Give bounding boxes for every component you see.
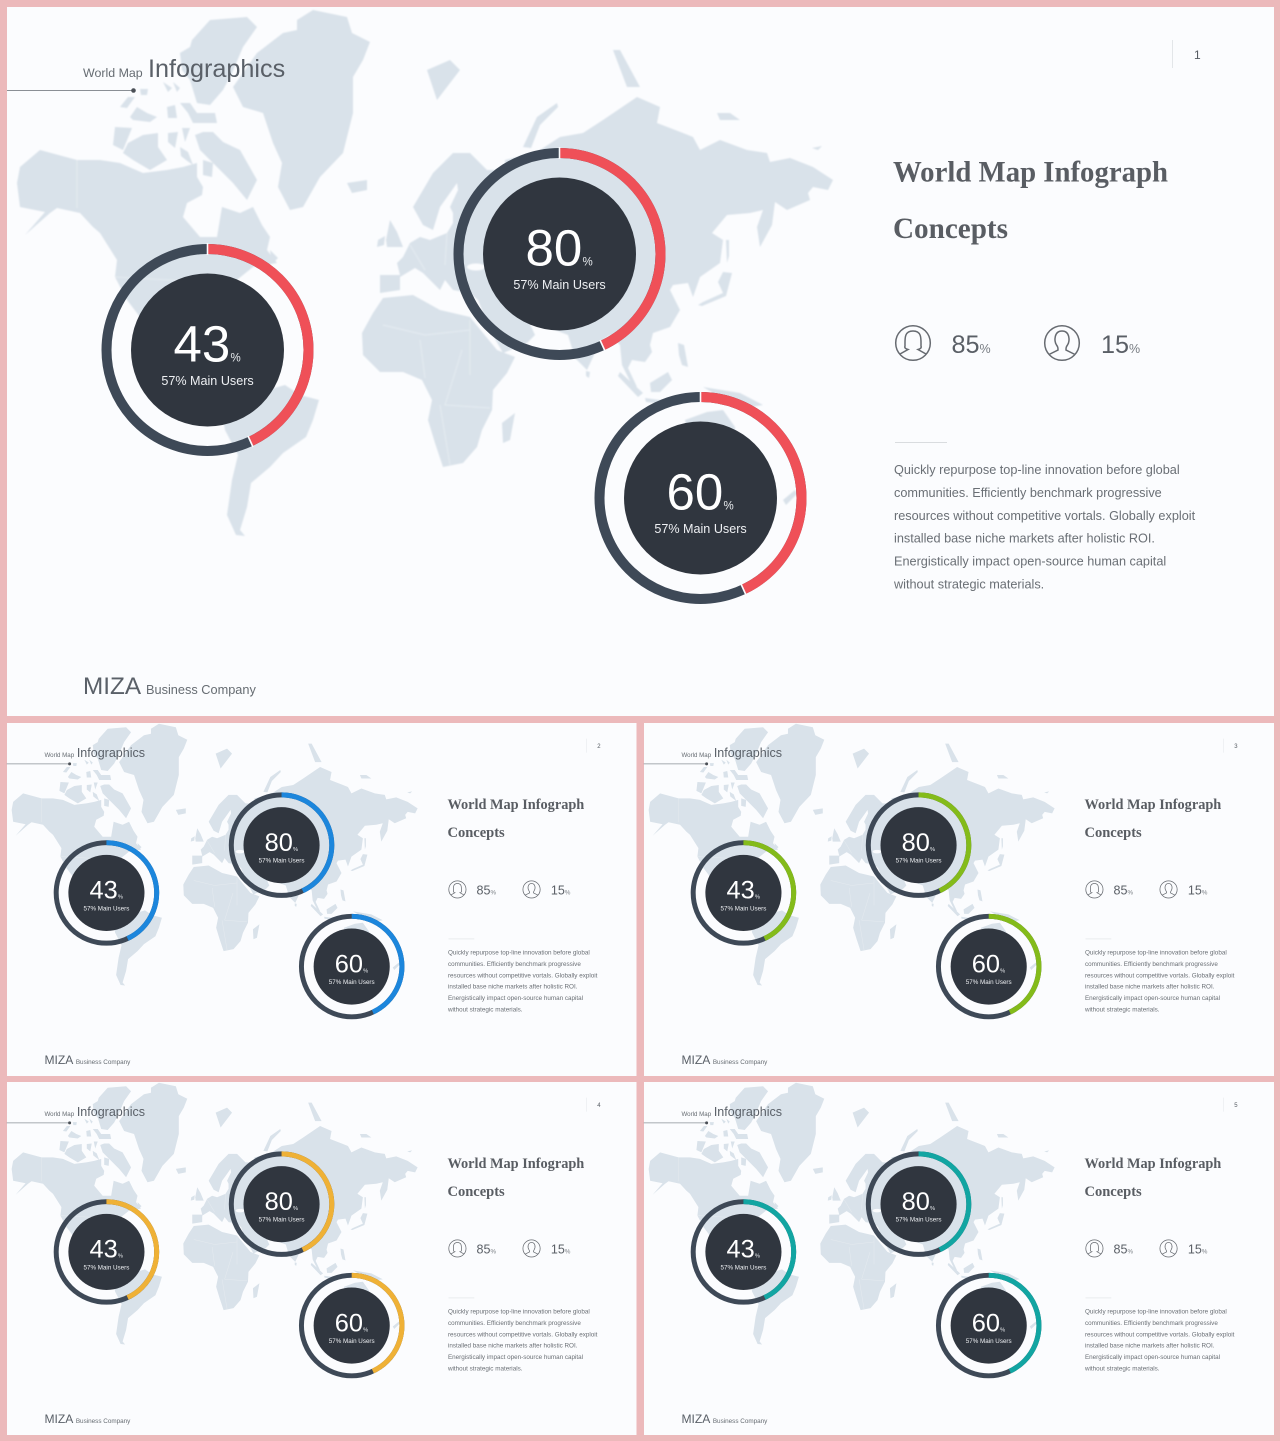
description paragraph: without strategic materials.: [447, 1365, 523, 1372]
heading pointer line: [644, 1121, 708, 1124]
heading: World Map Infographics: Infographics: [148, 55, 285, 83]
icon: man user: [523, 1240, 540, 1257]
donut: 80 percent: [458, 147, 660, 355]
title: Concepts: [1084, 1184, 1142, 1200]
donut: 43 percent: [56, 1202, 157, 1302]
donut: 80 percent: %: [930, 847, 935, 853]
icon: woman user: [1086, 881, 1103, 898]
page number: [1224, 739, 1238, 753]
heading: World Map: [44, 1111, 75, 1118]
footer: company name: [681, 1053, 768, 1067]
stat: 15 percent: [551, 1242, 571, 1256]
donut: 43 percent: %: [230, 352, 241, 364]
description paragraph: installed base niche markets after holistic ROI.: [448, 984, 578, 991]
donut: 43 percent: 57% Main Users: [84, 905, 129, 912]
footer: company name: Business Company: [713, 1418, 768, 1425]
donut: 60 percent: 57% Main Users: [966, 1338, 1012, 1345]
heading: Infographics: [77, 746, 145, 760]
donut: 43 percent: 43: [174, 316, 230, 372]
donut: 80 percent: 57% Main Users: [896, 1217, 941, 1224]
donut: 60 percent: [600, 391, 802, 599]
donut: 80 percent: 80: [265, 1188, 293, 1216]
donut: 43 percent: %: [755, 1254, 760, 1260]
stat: 85 percent: 85: [1114, 883, 1128, 897]
world map: [12, 1083, 418, 1344]
heading pointer line: [7, 1121, 71, 1124]
stat: 85 percent: 85: [477, 1242, 491, 1256]
footer: company name: MIZA: [44, 1412, 74, 1426]
description paragraph: Quickly repurpose top-line innovation before global: [448, 950, 590, 957]
title: Concepts: [447, 825, 505, 841]
donut: 60 percent: %: [724, 500, 734, 512]
donut: 43 percent: [693, 843, 794, 943]
description paragraph: resources without competitive vortals. Globally exploit: [448, 972, 598, 979]
donut: 60 percent: 57% Main Users: [329, 1338, 375, 1345]
description paragraph: [1084, 1309, 1235, 1372]
description paragraph: Energistically impact open-source human capital: [1085, 1354, 1220, 1361]
description paragraph: without strategic materials.: [447, 1006, 523, 1013]
donut: 80 percent: 57% Main Users: [259, 858, 304, 865]
title: World Map Infograph Concepts: [893, 156, 1168, 245]
footer: company name: Business Company: [713, 1059, 768, 1066]
description paragraph: [447, 1309, 598, 1372]
stat: 85 percent: [1114, 1242, 1134, 1256]
icon: man user: [1160, 1240, 1177, 1257]
stat: 85 percent: [1114, 883, 1134, 897]
panel: slide 4, amber accent: [7, 1082, 637, 1435]
icon: woman user: [449, 881, 466, 898]
stat: 15 percent: %: [1202, 889, 1208, 896]
description paragraph: communities. Efficiently benchmark progressive: [894, 486, 1162, 500]
description paragraph: Energistically impact open-source human capital: [1085, 995, 1220, 1002]
description paragraph: Quickly repurpose top-line innovation before global: [448, 1309, 590, 1316]
heading: [44, 746, 145, 760]
page number: [587, 739, 601, 753]
donut: 80 percent: %: [293, 847, 298, 853]
donut: 80 percent: [868, 1154, 969, 1254]
panel: slide 3, green accent: [644, 723, 1274, 1076]
stat: 15 percent: [1188, 1242, 1208, 1256]
donut: 80 percent: %: [293, 1206, 298, 1212]
donut: 60 percent: [301, 1275, 402, 1376]
stat: 85 percent: %: [491, 889, 497, 896]
description paragraph: Quickly repurpose top-line innovation before global: [894, 463, 1180, 477]
donut: 43 percent: 57% Main Users: [721, 905, 766, 912]
title: [1084, 797, 1222, 841]
donut: 80 percent: 57% Main Users: [259, 1217, 304, 1224]
description paragraph: installed base niche markets after holistic ROI.: [1085, 984, 1215, 991]
heading: World Map: [681, 1111, 712, 1118]
stat: 15 percent: %: [1129, 342, 1140, 356]
short divider: [895, 442, 947, 444]
donut: 60 percent: [938, 916, 1039, 1017]
donut: 80 percent: 80: [902, 1188, 930, 1216]
donut: 80 percent: [868, 795, 969, 895]
world map: [649, 1083, 1055, 1344]
donut: 60 percent: 57% Main Users: [329, 979, 375, 986]
icon: woman user: [896, 326, 930, 360]
stat: 15 percent: 15: [1188, 883, 1202, 897]
stat: 15 percent: %: [1202, 1248, 1208, 1255]
description paragraph: without strategic materials.: [1084, 1365, 1160, 1372]
donut: 43 percent: 43: [90, 1236, 118, 1264]
heading pointer line: [7, 762, 71, 765]
donut: 43 percent: 57% Main Users: [161, 374, 254, 388]
donut: 60 percent: %: [1000, 1327, 1005, 1333]
donut: 80 percent: 80: [902, 829, 930, 857]
donut: 60 percent: %: [363, 968, 368, 974]
donut: 43 percent: %: [118, 1254, 123, 1260]
title: Concepts: [1084, 825, 1142, 841]
stat: 15 percent: %: [565, 889, 571, 896]
stat: 85 percent: 85: [477, 883, 491, 897]
title: World Map Infograph Concepts: World Map Infograph: [893, 156, 1168, 188]
donut: 60 percent: %: [363, 1327, 368, 1333]
world map: [649, 724, 1055, 985]
donut: 43 percent: 57% Main Users: [84, 1264, 129, 1271]
world map: [12, 724, 418, 985]
donut: 43 percent: 43: [727, 1236, 755, 1264]
short divider: [1085, 1297, 1111, 1299]
description paragraph: resources without competitive vortals. Globally exploit: [894, 509, 1196, 523]
description paragraph: communities. Efficiently benchmark progressive: [1085, 961, 1218, 968]
description paragraph: installed base niche markets after holistic ROI.: [894, 532, 1155, 546]
donut: 60 percent: [301, 916, 402, 1017]
stat: 15 percent: [551, 883, 571, 897]
donut: 80 percent: 80: [265, 829, 293, 857]
title: [447, 1156, 585, 1200]
heading pointer line: [7, 88, 136, 93]
description paragraph: Energistically impact open-source human capital: [448, 995, 583, 1002]
donut: 80 percent: %: [582, 256, 593, 268]
donut: 60 percent: 60: [972, 950, 1000, 978]
panel: main slide, red accent: [7, 7, 1274, 716]
donut: 43 percent: 43: [90, 877, 118, 905]
heading: [681, 1105, 782, 1119]
heading: Infographics: [714, 1105, 782, 1119]
donut: 43 percent: 57% Main Users: [721, 1264, 766, 1271]
donut: 80 percent: [231, 1154, 332, 1254]
heading: [681, 746, 782, 760]
donut: 60 percent: 60: [335, 1309, 363, 1337]
slide 4 content: [7, 1083, 601, 1426]
footer: company name: MIZA: [44, 1053, 74, 1067]
page number: 3: [1234, 744, 1238, 750]
page number: 1: [1194, 48, 1201, 62]
description paragraph: installed base niche markets after holistic ROI.: [448, 1343, 578, 1350]
footer: company name: [44, 1053, 131, 1067]
page number: [1224, 1098, 1238, 1112]
stat: 15 percent: 15: [1101, 331, 1129, 359]
title: World Map Infograph: [1084, 797, 1222, 813]
title: [1084, 1156, 1222, 1200]
description paragraph: Quickly repurpose top-line innovation before global: [1085, 1309, 1227, 1316]
panel: slide 5, teal accent: [644, 1082, 1274, 1435]
world map: [17, 10, 833, 536]
title: [447, 797, 585, 841]
short divider: [448, 1297, 474, 1299]
slide 2 content: [7, 724, 601, 1067]
donut: 60 percent: 57% Main Users: [966, 979, 1012, 986]
donut: 80 percent: %: [930, 1206, 935, 1212]
page number: 2: [597, 744, 601, 750]
icon: woman user: [449, 1240, 466, 1257]
donut: 43 percent: 43: [727, 877, 755, 905]
icon: man user: [1045, 326, 1079, 360]
description paragraph: communities. Efficiently benchmark progressive: [448, 1320, 581, 1327]
title: Concepts: [447, 1184, 505, 1200]
heading: Infographics: [77, 1105, 145, 1119]
heading: World Map: [681, 752, 712, 759]
description paragraph: [1084, 950, 1235, 1013]
stat: 85 percent: [477, 1242, 497, 1256]
stat: 85 percent: [477, 883, 497, 897]
description paragraph: resources without competitive vortals. Globally exploit: [1085, 1331, 1235, 1338]
description paragraph: [893, 463, 1196, 591]
stat: 85 percent: 85: [952, 331, 980, 359]
description paragraph: without strategic materials.: [1084, 1006, 1160, 1013]
title: World Map Infograph: [447, 797, 585, 813]
stat: 85 percent: %: [1128, 889, 1134, 896]
page number: 4: [597, 1103, 601, 1109]
heading pointer line: [644, 762, 708, 765]
heading: World Map Infographics: World Map: [83, 66, 143, 80]
donut: 43 percent: [56, 843, 157, 943]
title: World Map Infograph: [447, 1156, 585, 1172]
description paragraph: [447, 950, 598, 1013]
stat: 15 percent: 15: [551, 1242, 565, 1256]
donut: 60 percent: [938, 1275, 1039, 1376]
slide 5 content: [644, 1083, 1238, 1426]
page number: [1172, 40, 1201, 68]
description paragraph: without strategic materials.: [893, 577, 1044, 591]
panel: slide 2, blue accent: [7, 723, 637, 1076]
donut: 80 percent: [231, 795, 332, 895]
icon: man user: [1160, 881, 1177, 898]
footer: company name: [44, 1412, 131, 1426]
footer: company name: MIZA: [681, 1412, 711, 1426]
footer: company name: Business Company: [76, 1059, 131, 1066]
heading: Infographics: [714, 746, 782, 760]
footer: company name: Business Company: [76, 1418, 131, 1425]
donut: 60 percent: 60: [972, 1309, 1000, 1337]
donut: 60 percent: %: [1000, 968, 1005, 974]
description paragraph: Energistically impact open-source human capital: [448, 1354, 583, 1361]
footer: company name: [681, 1412, 768, 1426]
donut: 43 percent: %: [755, 895, 760, 901]
stat: 85 percent: 85: [1114, 1242, 1128, 1256]
slide 3 content: [644, 724, 1238, 1067]
page number: [587, 1098, 601, 1112]
stat: 85 percent: %: [491, 1248, 497, 1255]
donut: 43 percent: [106, 243, 308, 451]
donut: 60 percent: 57% Main Users: [654, 522, 747, 536]
title: World Map Infograph: [1084, 1156, 1222, 1172]
donut: 60 percent: 60: [666, 464, 723, 520]
page number: 5: [1234, 1103, 1238, 1109]
icon: man user: [523, 881, 540, 898]
stat: 85 percent: %: [1128, 1248, 1134, 1255]
donut: 60 percent: 60: [335, 950, 363, 978]
donut: 80 percent: 80: [526, 220, 582, 276]
short divider: [448, 938, 474, 940]
description paragraph: resources without competitive vortals. Globally exploit: [448, 1331, 598, 1338]
description paragraph: Energistically impact open-source human capital: [894, 554, 1166, 568]
footer: company name: [83, 673, 256, 700]
footer: company name: MIZA: [83, 673, 142, 700]
heading: World Map Infographics: [83, 55, 285, 83]
footer: company name: MIZA: [681, 1053, 711, 1067]
footer: company name: Business Company: [146, 682, 256, 697]
short divider: [1085, 938, 1111, 940]
title: World Map Infograph Concepts: Concepts: [893, 212, 1008, 245]
stat: 15 percent: 15: [551, 883, 565, 897]
stat: 15 percent: [1188, 883, 1208, 897]
stat: 15 percent: 15: [1188, 1242, 1202, 1256]
stat: 85 percent: %: [980, 342, 991, 356]
description paragraph: communities. Efficiently benchmark progressive: [448, 961, 581, 968]
heading: World Map: [44, 752, 75, 759]
donut: 80 percent: 57% Main Users: [896, 858, 941, 865]
donut: 43 percent: %: [118, 895, 123, 901]
donut: 80 percent: 57% Main Users: [513, 278, 606, 292]
stat: 15 percent: %: [565, 1248, 571, 1255]
icon: woman user: [1086, 1240, 1103, 1257]
donut: 43 percent: [693, 1202, 794, 1302]
description paragraph: communities. Efficiently benchmark progressive: [1085, 1320, 1218, 1327]
heading: [44, 1105, 145, 1119]
description paragraph: installed base niche markets after holistic ROI.: [1085, 1343, 1215, 1350]
description paragraph: Quickly repurpose top-line innovation before global: [1085, 950, 1227, 957]
description paragraph: resources without competitive vortals. Globally exploit: [1085, 972, 1235, 979]
